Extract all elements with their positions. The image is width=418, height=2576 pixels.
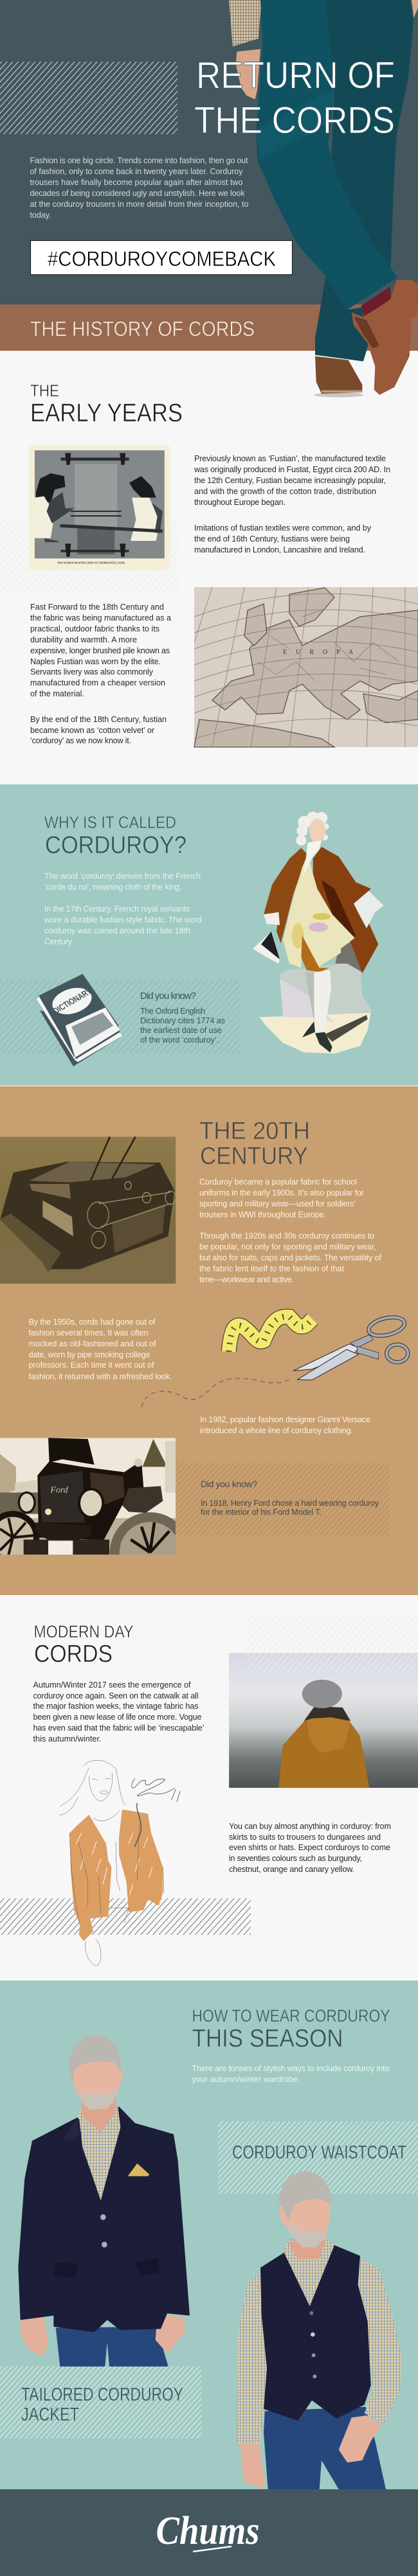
panel: modern day cords: [0, 1595, 418, 1981]
panel: how to wear corduroy: [0, 1981, 418, 2489]
heading: modern day cords: [33, 1622, 134, 1668]
did you know: dictionary: of the word ‘corduroy’.: [140, 1036, 219, 1045]
text: autumn winter 2017: [33, 1681, 204, 1743]
text: fustian origins: throughout Europe began.: [194, 498, 286, 507]
text: early 1900s: time—workwear and active.: [199, 1275, 294, 1284]
text: 1950s: fashion, it returned with a refreshed look.: [28, 1372, 172, 1381]
text: 1950s: By the 1950s, cords had gone out of: [28, 1318, 156, 1327]
did you know: Henry Ford: [201, 1479, 379, 1517]
did you know: dictionary: the earliest date of use: [140, 1026, 222, 1035]
text: stylish ways: [192, 2064, 390, 2084]
text: 18th century: Servants livery was also commonly: [30, 667, 154, 676]
text: 1982: introduced a whole line of corduroy clothing.: [200, 1426, 353, 1435]
hashtag box: #CORDUROYCOMEBACK: [48, 247, 276, 270]
stripes: waistcoat label: [218, 2121, 418, 2194]
text: buy almost anything: [229, 1822, 391, 1874]
intro paragraph: [30, 156, 248, 220]
photo: man in navy corduroy waistcoat: [237, 2171, 402, 2489]
text: 1982: In 1982, popular fashion designer Gianni Versace: [200, 1415, 370, 1424]
heading: the 20th century: THE 20TH: [199, 1118, 310, 1145]
panel: the 20th century: [0, 1086, 418, 1595]
hashtag box: [31, 240, 292, 275]
sketch: woman in orange corduroy jacket: [60, 1760, 180, 1966]
text: etymology: wore a durable fustian-style fabric. The word: [44, 915, 202, 924]
text: 1950s: date, worn by pipe smoking college: [28, 1350, 150, 1359]
title: RETURN OF: [196, 55, 395, 96]
intro paragraph: at the corduroy trousers in more detail from their inception, to: [30, 200, 248, 209]
text: buy almost anything: You can buy almost anything in corduroy: from: [229, 1822, 391, 1831]
text: fustian origins: manufactured in London, Lancashire and Ireland.: [194, 545, 365, 554]
text: buy almost anything: chestnut, orange and canary yellow.: [229, 1865, 354, 1874]
dashed thread: [141, 1379, 289, 1407]
text: 18th century: expensive, longer brushed pile known as: [30, 646, 170, 655]
heading: the early years: [30, 381, 183, 427]
text: 18th century: became known as ‘cotton velvet’ or: [30, 726, 154, 735]
text: early 1900s: the fabric lent itself to the fashion of that: [199, 1264, 345, 1273]
intro paragraph: today.: [30, 211, 51, 220]
heading: how to wear: THIS SEASON: [192, 2025, 343, 2052]
text: early 1900s: Through the 1920s and 30s corduroy continues to: [199, 1231, 374, 1240]
icon: yellow measuring tape: [229, 1316, 313, 1352]
did you know: Henry Ford: for the interior of his Ford Model T.: [201, 1508, 322, 1517]
text: 18th century: Naples Fustian was worn by the elite.: [30, 657, 161, 666]
did you know: dictionary: Did you know?: [140, 991, 196, 1001]
text: fustian origins: the 12th Century, Fustian became increasingly popular,: [194, 476, 386, 485]
text: 1950s: [28, 1318, 172, 1381]
faint stripes over photo: [247, 1617, 418, 1672]
stripes: jacket label: [0, 2366, 201, 2439]
illustration: 18th century nobleman: [253, 811, 384, 1054]
text: etymology: Century: [44, 937, 73, 946]
text: 18th century: manufactured from a cheaper version: [30, 678, 165, 687]
text: autumn winter 2017: the major fashion weeks, the vintage fabric has: [33, 1702, 198, 1711]
heading: the 20th century: [199, 1118, 310, 1170]
brown history band: [0, 304, 418, 351]
title: [194, 55, 395, 141]
label: tailored corduroy jacket: JACKET: [21, 2404, 79, 2425]
heading: the early years: THE: [30, 381, 59, 400]
text: 1950s: professors. Each time it went out of: [28, 1361, 154, 1370]
text: 1950s: mocked as old-fashioned and out of: [28, 1339, 156, 1348]
footer: [0, 2489, 418, 2576]
text: early 1900s: sporting and military wear—used for soldiers’: [199, 1199, 356, 1208]
heading: the history of cords: THE HISTORY OF CORDS: [30, 317, 255, 340]
heading: how to wear: [192, 2006, 390, 2052]
logo: Chums: Chums: [156, 2509, 260, 2553]
image: Ford Model T: Ford: [50, 1485, 69, 1495]
text: etymology: ‘corde du roi’, meaning cloth of the king.: [44, 883, 181, 892]
did you know: Henry Ford: Did you know?: [201, 1479, 257, 1489]
image: person in corduroy coat and hat: [229, 1653, 418, 1788]
text: 18th century: practical, outdoor fabric thanks to its: [30, 624, 159, 633]
image: textile machine: [0, 1137, 176, 1284]
text: fustian origins: Previously known as ‘Fustian’, the manufactured textile: [194, 454, 386, 463]
intro paragraph: decades of being considered ugly and unstylish. Here we look: [30, 189, 245, 198]
icon: dictionary book: [36, 974, 122, 1066]
text: autumn winter 2017: been given a new lease of life once more. Vogue: [33, 1713, 202, 1722]
text: fustian origins: [194, 454, 390, 554]
photo: man's legs in teal corduroy trousers: [229, 0, 418, 397]
text: 18th century: the fabric was being manufactured as a: [30, 613, 171, 622]
heading: modern day cords: CORDS: [34, 1641, 113, 1668]
text: early 1900s: be popular, not only for sporting and military wear,: [199, 1242, 376, 1251]
text: early 1900s: Corduroy became a popular fabric for school: [199, 1178, 357, 1187]
text: stylish ways: your autumn/winter wardrobe.: [192, 2075, 300, 2084]
text: etymology: [44, 872, 202, 946]
panel: why is it called corduroy: [0, 784, 418, 1086]
heading: why is it called corduroy: WHY IS IT CALLED: [44, 813, 176, 832]
intro paragraph: trousers have finally become popular again after almost two: [30, 178, 243, 187]
text: buy almost anything: skirts to suits to trousers to dungarees and: [229, 1833, 381, 1842]
text: fustian origins: and with the growth of the cotton trade, distribution: [194, 487, 376, 496]
hero panel: [0, 0, 418, 397]
text: etymology: The word ‘corduroy’ derives from the French: [44, 872, 201, 881]
label: tailored corduroy jacket: [21, 2385, 183, 2425]
text: 1950s: fashion several times. It was often: [28, 1328, 148, 1337]
image: antique map of Europe: [194, 587, 418, 747]
hero stripe block: [0, 62, 177, 134]
image: women weaving on a loom: TWO WOMEN WEAVING LINEN AT A HORIZONTAL LOOM.: [57, 561, 125, 564]
panel: early years: [0, 381, 418, 747]
did you know: dictionary: The Oxford English: [140, 1007, 205, 1016]
text: 18th century: Fast Forward to the 18th Century and: [30, 603, 164, 612]
text: early 1900s: [199, 1178, 382, 1284]
icon: scissors: [293, 1314, 408, 1380]
label: tailored corduroy jacket: TAILORED CORDUROY: [21, 2385, 183, 2405]
image: Ford Model T: [0, 1438, 176, 1555]
faint stripes behind loom: [0, 519, 179, 592]
text: buy almost anything: even shirts or hats. Expect corduroys to come: [229, 1843, 390, 1852]
did you know: Henry Ford: In 1918, Henry Ford chose a hard wearing corduroy: [201, 1499, 379, 1508]
text: autumn winter 2017: corduroy once again. Seen on the catwalk at all: [33, 1691, 198, 1700]
text: early 1900s: trousers in WWI throughout Europe.: [199, 1210, 326, 1219]
icon: dictionary book: DICTIONARY: [51, 987, 95, 1016]
heading: the early years: EARLY YEARS: [30, 399, 183, 427]
text: buy almost anything: in seventies colours such as burgundy,: [229, 1854, 362, 1863]
text: 1982: [200, 1415, 370, 1435]
image: women weaving on a loom: [29, 445, 170, 570]
intro paragraph: Fashion is one big circle. Trends come into fashion, then go out: [30, 156, 248, 165]
text: 18th century: durability and warmth. A more: [30, 635, 137, 644]
text: 18th century: of the material.: [30, 689, 84, 698]
text: fustian origins: the end of 16th Century, fustians were being: [194, 534, 350, 543]
text: autumn winter 2017: this autumn/winter.: [33, 1734, 102, 1743]
stripes behind did you know: [176, 1463, 390, 1535]
text: etymology: corduroy was coined around the late 18th: [44, 926, 190, 935]
stripes behind dictionary: [0, 980, 240, 1054]
text: 18th century: [30, 603, 171, 745]
text: stylish ways: There are tonnes of stylish ways to include corduroy into: [192, 2064, 390, 2073]
heading: the 20th century: CENTURY: [200, 1143, 308, 1170]
text: autumn winter 2017: has even said that the fabric will be ‘inescapable’: [33, 1724, 204, 1733]
intro paragraph: of fashion, only to come back in twenty years later. Corduroy: [30, 167, 243, 176]
text: early 1900s: but also for suits, caps and jackets. The versatility of: [199, 1253, 382, 1262]
heading: why is it called corduroy: CORDUROY?: [45, 832, 186, 859]
heading: why is it called corduroy: [44, 813, 186, 859]
dark stripe band: [0, 1898, 251, 1935]
text: 18th century: ‘corduroy’ as we now know it.: [30, 736, 131, 745]
text: early 1900s: uniforms in the early 1900s. It’s also popular for: [199, 1188, 364, 1197]
did you know: dictionary: Dictionary cites 1774 as: [140, 1016, 225, 1025]
heading: modern day cords: MODERN DAY: [33, 1622, 134, 1641]
text: autumn winter 2017: Autumn/Winter 2017 sees the emergence of: [33, 1681, 191, 1689]
text: 18th century: By the end of the 18th Century, fustian: [30, 715, 167, 724]
image: antique map of Europe: EUROPA: [283, 649, 362, 656]
text: fustian origins: was originally produced in Fustat, Egypt circa 200 AD. In: [194, 465, 390, 474]
photo: man in navy corduroy jacket: [18, 2034, 190, 2367]
did you know: dictionary: [140, 991, 225, 1045]
text: fustian origins: Imitations of fustian textiles were common, and by: [194, 524, 372, 533]
text: etymology: In the 17th Century, French royal servants: [44, 904, 190, 913]
title: THE CORDS: [194, 100, 395, 141]
